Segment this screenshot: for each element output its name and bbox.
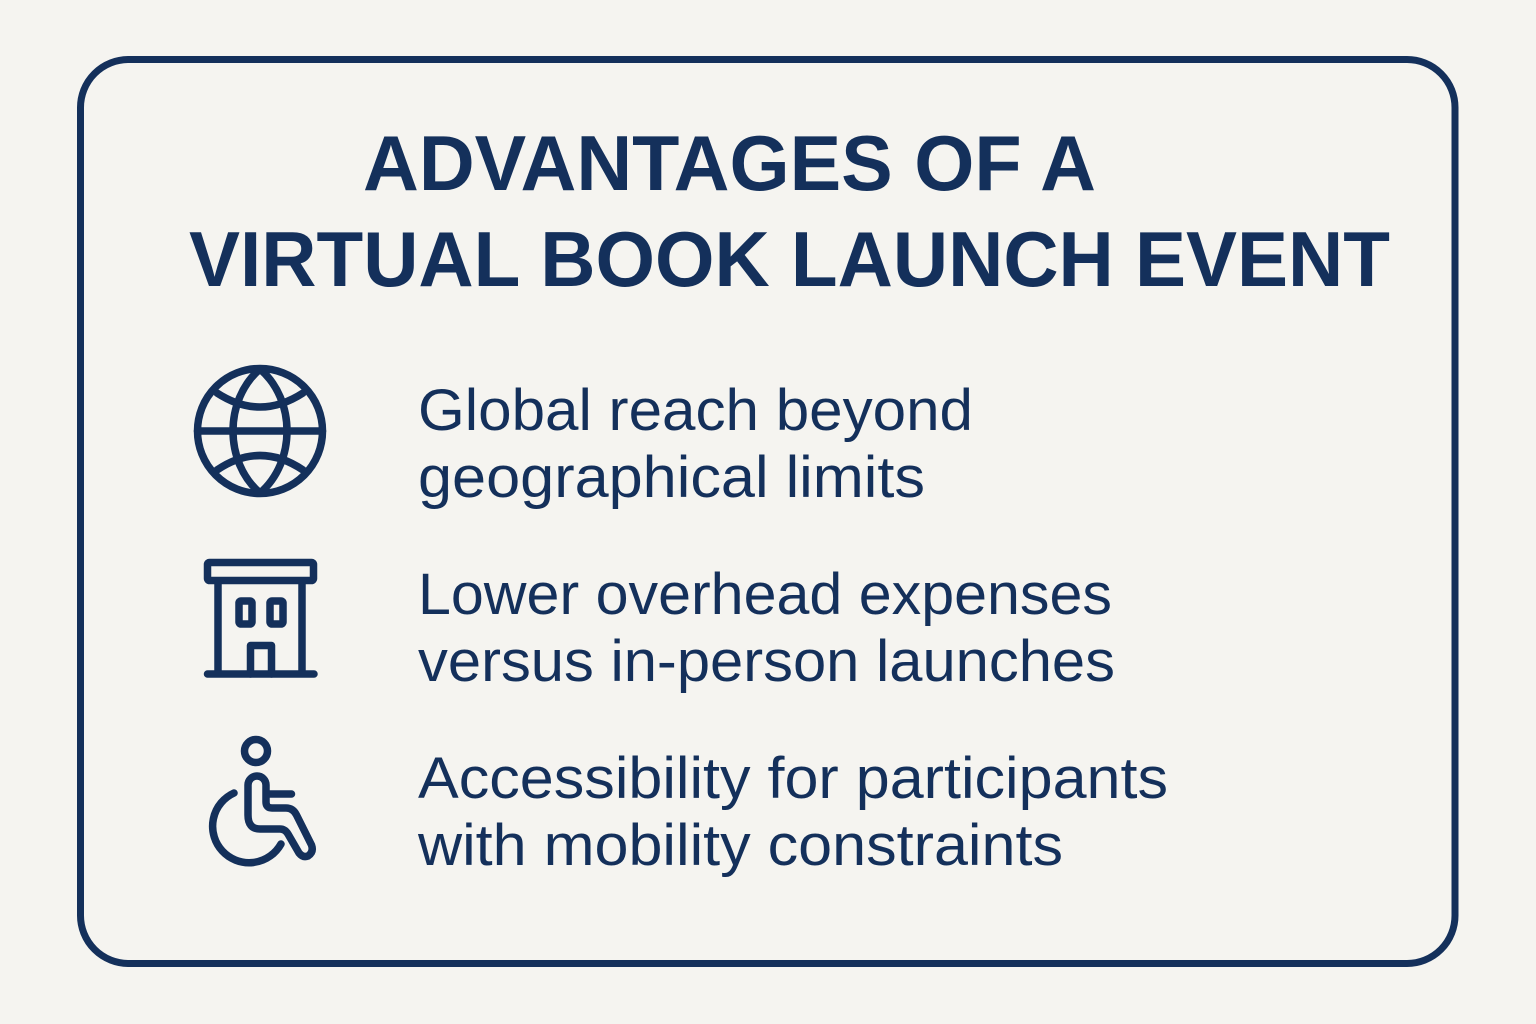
text: accessibility: Accessibility for participants xyxy=(418,746,1168,811)
title: VIRTUAL BOOK LAUNCH EVENT xyxy=(189,215,1390,303)
title: ADVANTAGES OF A xyxy=(363,119,1096,207)
text: accessibility: with mobility constraints xyxy=(417,813,1063,878)
icon: wheelchair accessibility xyxy=(213,740,312,863)
panel: rounded frame xyxy=(80,60,1455,964)
title xyxy=(189,119,1390,303)
text: global reach: Global reach beyond xyxy=(418,378,973,443)
text: lower overhead: Lower overhead expenses xyxy=(418,562,1112,627)
text: accessibility xyxy=(417,746,1168,878)
icon: building xyxy=(208,562,314,674)
icon: globe xyxy=(198,368,322,494)
text: global reach xyxy=(418,378,973,510)
text: lower overhead xyxy=(418,562,1115,694)
text: lower overhead: versus in-person launches xyxy=(418,629,1115,694)
text: global reach: geographical limits xyxy=(418,445,925,510)
